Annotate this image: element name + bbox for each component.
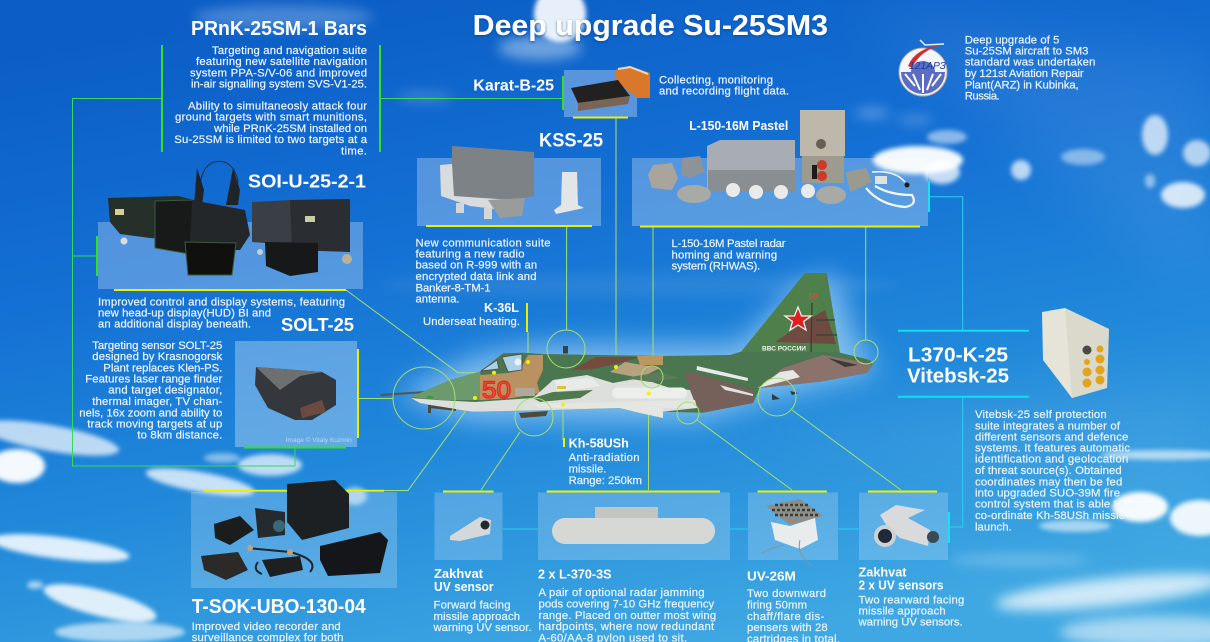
description: into upgraded SUO-39M fire xyxy=(975,488,1120,500)
belly and inlet xyxy=(411,375,697,412)
heading: 2 x L-370-3S xyxy=(538,568,612,582)
right bar xyxy=(357,349,359,438)
description xyxy=(432,599,532,634)
description: encrypted data link and xyxy=(416,271,536,283)
dispenser photo xyxy=(762,499,823,566)
top bar xyxy=(204,490,384,492)
description xyxy=(98,296,345,330)
recorder photo xyxy=(571,66,650,111)
description: featuring new satellite navigation xyxy=(196,56,367,68)
equipment photo: displays and control units xyxy=(108,161,352,276)
heading: Zakhvat xyxy=(858,565,907,579)
description: while PRnK-25SM installed on xyxy=(213,123,367,135)
block: Kh-58USh xyxy=(564,437,642,487)
description: system PPA-S/V-06 and improved xyxy=(190,67,367,79)
description: based on R-999 with an xyxy=(416,260,537,272)
description: warning UV sensors. xyxy=(858,617,963,629)
block: T-SOK-UBO-130-04 xyxy=(191,480,397,642)
heading: SOI-U-25-2-1 xyxy=(248,170,366,192)
bar xyxy=(526,303,528,332)
heading: L-150-16M Pastel xyxy=(689,118,788,133)
description xyxy=(965,34,1095,102)
description: Underseat heating. xyxy=(423,316,520,328)
heading: L370-K-25 xyxy=(908,344,1008,367)
description: Targeting sensor SOLT-25 xyxy=(92,340,222,352)
tail markings: ВВС РОССИИ xyxy=(762,346,806,352)
description: time. xyxy=(341,145,367,157)
heading: UV sensor xyxy=(434,580,494,594)
description xyxy=(416,237,550,305)
heading: K-36L xyxy=(484,301,519,315)
heading xyxy=(858,565,944,592)
right bar xyxy=(928,181,930,212)
aircraft Su-25SM3: 50 xyxy=(808,292,818,301)
description: co-ordinate Kh-58USh missle xyxy=(975,510,1125,522)
bottom bar xyxy=(244,446,346,448)
nose gear xyxy=(428,405,456,413)
sensor photo xyxy=(255,367,336,420)
nose probe xyxy=(380,391,426,396)
description: New communication suite xyxy=(416,237,550,249)
image panel xyxy=(191,492,397,588)
description: pensers with 28 xyxy=(747,622,828,634)
connector lines xyxy=(72,98,963,529)
radar warning units photo xyxy=(648,110,914,207)
description: thermal imager, TV chan- xyxy=(92,396,223,408)
image panel xyxy=(538,492,730,560)
description: Two downward xyxy=(747,588,826,600)
description: system (RHWAS). xyxy=(672,260,760,272)
description: missile approach xyxy=(434,611,520,623)
heading: Zakhvat xyxy=(434,567,484,581)
heading: KSS-25 xyxy=(539,131,603,152)
pod photo xyxy=(552,507,715,544)
sensor photo xyxy=(874,505,939,547)
description: homing and warning xyxy=(672,249,777,261)
description xyxy=(569,452,642,487)
engine nacelle xyxy=(684,372,753,413)
left bar xyxy=(96,236,98,276)
description: and recording flight data. xyxy=(659,85,789,97)
top bar xyxy=(868,490,937,492)
description: Plant(ARZ) in Kubinka, xyxy=(965,79,1079,91)
Kh-58USh missile xyxy=(533,400,697,418)
description: in-air signalling system SVS-V1-25. xyxy=(191,79,367,91)
nose green xyxy=(411,372,485,400)
description: missile approach xyxy=(858,606,946,618)
rear pylons xyxy=(772,391,798,400)
top bar xyxy=(547,490,720,492)
callout circles xyxy=(393,330,878,436)
description xyxy=(858,594,964,629)
side number 50: 50 xyxy=(482,377,511,404)
image panel xyxy=(434,492,502,560)
description: pods covering 7-10 GHz frequency xyxy=(538,598,715,610)
description: firing 50mm xyxy=(747,599,807,611)
image panel xyxy=(98,222,363,289)
description: featuring a new radio xyxy=(416,249,524,261)
description: and target designator, xyxy=(108,385,222,397)
description: ground targets with smart munitions, xyxy=(175,112,367,124)
description xyxy=(659,75,789,97)
description: nels, 16x zoom and ability to xyxy=(79,407,222,419)
callout dots xyxy=(473,360,651,406)
description: Plant replaces Klen-PS. xyxy=(103,362,222,374)
description: missile. xyxy=(569,464,606,476)
radio unit photo xyxy=(440,146,534,219)
description: Vitebsk-25 self protection xyxy=(975,409,1107,421)
description: systems. It features automatic xyxy=(975,443,1130,455)
description: an additional display beneath. xyxy=(98,318,251,330)
description: Improved control and display systems, featuring xyxy=(98,296,345,308)
sensor photo xyxy=(450,517,491,541)
description xyxy=(79,340,223,442)
heading: UV-26M xyxy=(747,570,796,584)
description: Range: 250km xyxy=(569,475,642,487)
description: suite integrates a number of xyxy=(975,420,1121,432)
insignia xyxy=(515,388,535,396)
left bar xyxy=(562,76,564,110)
heading: SOLT-25 xyxy=(281,314,354,335)
top bar xyxy=(443,490,494,492)
description: identification and geolocation xyxy=(975,454,1128,466)
jamming pod xyxy=(612,388,687,398)
heading rules xyxy=(898,331,1029,397)
description: designed by Krasnogorsk xyxy=(92,351,223,363)
equipment photo xyxy=(201,480,388,580)
bottom bar xyxy=(426,225,592,227)
image panel xyxy=(748,492,838,560)
bottom bar xyxy=(640,226,920,228)
bottom bar xyxy=(573,116,628,118)
description: Su-25SM aircraft to SM3 xyxy=(965,45,1088,57)
description: Forward facing xyxy=(434,599,510,611)
image panel xyxy=(417,158,601,226)
block: K-36L xyxy=(423,301,527,332)
heading: T-SOK-UBO-130-04 xyxy=(192,596,367,618)
description xyxy=(192,621,343,642)
block: KSS-25 xyxy=(416,131,603,305)
block: L-370-3S pods xyxy=(538,492,730,642)
tail fin xyxy=(740,273,840,353)
bottom bar xyxy=(114,289,346,291)
description: Two rearward facing xyxy=(858,594,964,606)
description xyxy=(174,45,368,157)
description: Banker-8-TM-1 xyxy=(416,282,490,294)
left and right green bars xyxy=(162,45,380,152)
description xyxy=(747,588,840,642)
image credit: Image © Vitaly Kuzmin xyxy=(286,436,352,444)
description: warning UV sensor. xyxy=(432,622,532,634)
description: hardpoints, where now redundant xyxy=(538,621,715,633)
description: L-150-16M Pastel radar xyxy=(672,238,786,250)
description: track moving targets at up xyxy=(87,419,222,431)
heading: PRnK-25SM-1 Bars xyxy=(191,17,367,40)
description xyxy=(672,238,786,272)
block: Karat-B-25 xyxy=(473,66,789,118)
description xyxy=(538,587,716,642)
canopy xyxy=(481,354,522,372)
description: Improved video recorder and xyxy=(192,621,341,633)
tan cockpit section xyxy=(480,355,543,400)
description: to 8km distance. xyxy=(137,430,222,442)
description: antenna. xyxy=(416,293,460,305)
block: SOI-U-25-2-1 xyxy=(97,161,366,330)
antenna photo xyxy=(554,172,584,214)
description: launch. xyxy=(975,521,1012,533)
heading: Karat-B-25 xyxy=(473,78,554,95)
aircraft glow xyxy=(395,275,880,420)
antenna xyxy=(563,346,568,354)
description: Features laser range finder xyxy=(85,374,223,386)
block: PRnK-25SM-1 Bars xyxy=(162,17,380,157)
pylon tank xyxy=(519,411,548,418)
description: range. Placed on outter most wing xyxy=(538,610,716,622)
description: by 121st Aviation Repair xyxy=(965,68,1084,80)
description: Targeting and navigation suite xyxy=(212,45,367,57)
block: L-150-16M Pastel xyxy=(632,110,929,272)
block: rear Zakhvat 2 x UV sensors xyxy=(858,492,964,629)
description xyxy=(975,409,1130,533)
rear fuselage xyxy=(758,355,873,388)
heading xyxy=(907,344,1009,388)
description: different sensors and defence xyxy=(975,431,1128,443)
description: Deep upgrade of 5 xyxy=(965,34,1059,46)
unit photo xyxy=(1042,308,1109,398)
fuselage xyxy=(411,352,873,413)
description: Su-25SM is limited to two targets at a xyxy=(174,134,368,146)
heading xyxy=(434,567,494,594)
heading: 2 x UV sensors xyxy=(858,578,944,592)
description: of threat source(s). Obtained xyxy=(975,465,1122,477)
sensor lens xyxy=(480,520,490,530)
right bar xyxy=(948,512,950,543)
description: new head-up display(HUD) BI and xyxy=(98,307,271,319)
block: forward Zakhvat UV sensor xyxy=(432,492,532,634)
image panel xyxy=(564,70,637,117)
heading: Kh-58USh xyxy=(569,437,629,451)
tail star xyxy=(785,307,811,330)
image panel xyxy=(235,341,357,447)
description: chaff/flare dis- xyxy=(747,611,825,623)
camouflage patches xyxy=(572,357,640,370)
description: A pair of optional radar jamming xyxy=(538,587,704,599)
image panel xyxy=(632,158,928,226)
aircraft Su-25SM3 xyxy=(380,273,873,418)
image panel xyxy=(859,492,948,560)
icon: 121 ARZ logo: 121АРЗ xyxy=(909,61,946,72)
block: repair plant note xyxy=(899,34,1095,102)
description: Collecting, monitoring xyxy=(659,75,773,87)
description: Anti-radiation xyxy=(569,452,640,464)
heading: Vitebsk-25 xyxy=(907,365,1009,388)
icon: 121 ARZ logo xyxy=(899,40,947,96)
bar xyxy=(563,438,565,447)
title: Deep upgrade Su-25SM3 xyxy=(473,10,828,42)
description: standard was undertaken xyxy=(965,57,1095,69)
block: L370-K-25 Vitebsk-25 xyxy=(898,308,1130,533)
description: control system that is able to xyxy=(975,499,1123,511)
description: coordinates may then be fed xyxy=(975,476,1122,488)
description: Russia. xyxy=(965,90,1000,102)
top bar xyxy=(758,490,827,492)
block: UV-26M xyxy=(747,492,840,642)
description: Ability to simultaneosly attack four xyxy=(188,100,367,112)
block: SOLT-25 xyxy=(79,314,358,448)
